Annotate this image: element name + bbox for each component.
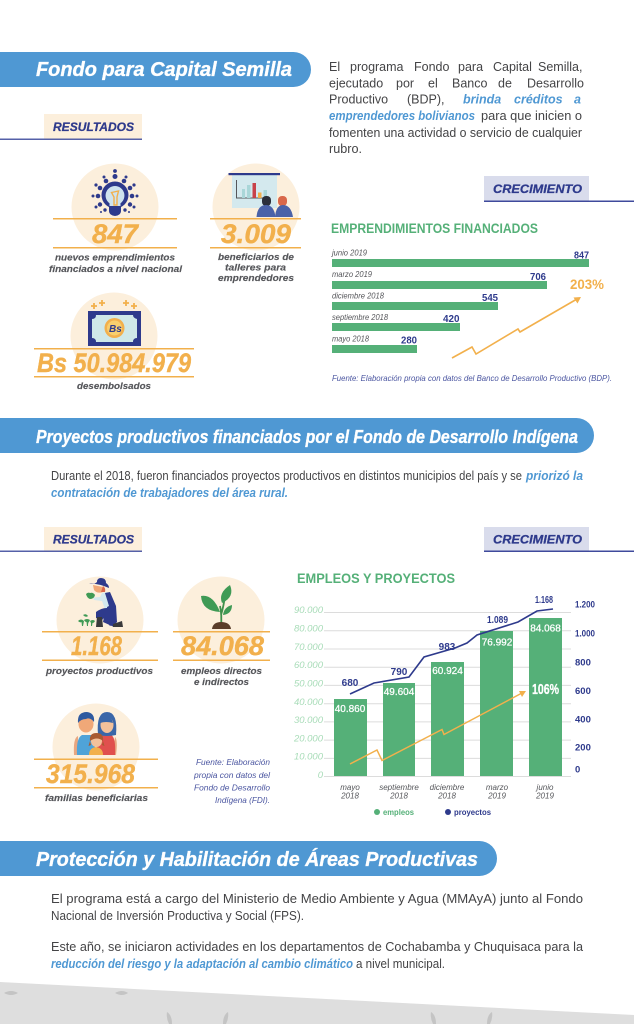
source note: FDI: Fondo de Desarrollo bbox=[194, 782, 270, 792]
combo chart: empleos y proyectos: 80.000 bbox=[294, 624, 324, 634]
tag: crecimiento 2: CRECIMIENTO bbox=[493, 532, 583, 546]
tag: resultados 2: RESULTADOS bbox=[53, 532, 134, 546]
intro paragraph: fomenten una actividad o servicio de cualquier bbox=[329, 126, 582, 140]
stat: 84.068 empleos: e indirectos bbox=[194, 677, 249, 688]
stat: Bs 50.984.979: Bs 50.984.979 bbox=[37, 348, 191, 378]
combo chart: empleos y proyectos: 1.200 bbox=[575, 600, 595, 610]
combo chart: empleos y proyectos: mayo bbox=[340, 783, 360, 792]
icon: family bbox=[74, 712, 117, 755]
bar chart: emprendimientos financiados: 545 bbox=[482, 293, 498, 304]
stat: 847 emprendimientos: financiados a nivel nacional bbox=[49, 264, 182, 275]
intro paragraph: créditos bbox=[514, 92, 563, 106]
bar chart: emprendimientos financiados: junio 2019 bbox=[331, 248, 368, 258]
stat: 3.009 beneficiarios: 3.009 bbox=[221, 219, 291, 249]
icon: presentation board bbox=[228, 173, 293, 217]
combo chart: empleos y proyectos: 20.000 bbox=[293, 734, 324, 744]
paragraph: FDI: contratación de trabajadores del área rural. bbox=[51, 486, 288, 500]
paragraph: FDI: Durante el 2018, fueron financiados proyectos productivos en distintos municipios del país y se bbox=[51, 469, 522, 483]
intro paragraph: para que inicien o bbox=[481, 109, 582, 123]
combo chart: empleos y proyectos: marzo bbox=[486, 783, 509, 792]
arrow: 106% growth bbox=[350, 691, 526, 764]
combo chart: empleos y proyectos: 983 bbox=[439, 642, 456, 653]
bar chart: emprendimientos financiados: Fuente: Elaboración propia con datos del Banco de Desarrollo Productivo (BDP). bbox=[332, 373, 612, 383]
combo chart: empleos y proyectos: 1.089 bbox=[487, 615, 508, 626]
combo chart: empleos y proyectos: 1.168 bbox=[535, 595, 553, 606]
tag: resultados 1: RESULTADOS bbox=[53, 120, 134, 134]
combo chart: empleos y proyectos: 400 bbox=[575, 714, 591, 726]
tag: crecimiento 1 bbox=[484, 176, 634, 202]
combo chart: empleos y proyectos: 600 bbox=[575, 686, 591, 697]
combo chart: empleos y proyectos: 2018 bbox=[437, 792, 456, 800]
paragraph: actividades: a nivel municipal. bbox=[356, 957, 445, 971]
tag: resultados 2 bbox=[0, 527, 142, 552]
intro paragraph: El bbox=[329, 60, 340, 74]
intro paragraph: rubro. bbox=[329, 142, 362, 156]
intro paragraph: (BDP), bbox=[407, 92, 444, 106]
stat: 3.009 beneficiarios: beneficiarios de bbox=[218, 252, 295, 263]
combo chart: empleos y proyectos bbox=[293, 571, 595, 817]
paragraph: actividades: Este año, se iniciaron actividades en los departamentos de Cochabamba y Chuquisaca para la bbox=[51, 940, 583, 954]
intro paragraph: Semilla, bbox=[538, 60, 582, 74]
bar chart: emprendimientos financiados: mayo 2018 bbox=[332, 334, 370, 344]
bar chart: emprendimientos financiados: 420 bbox=[443, 314, 460, 325]
combo chart: empleos y proyectos: 2019 bbox=[487, 792, 506, 800]
combo chart: empleos y proyectos: septiembre bbox=[379, 783, 419, 792]
combo chart: empleos y proyectos: 60.000 bbox=[294, 660, 324, 671]
combo chart: empleos y proyectos: EMPLEOS Y PROYECTOS bbox=[297, 571, 455, 586]
combo chart: empleos y proyectos: 0 bbox=[575, 764, 580, 776]
stat: 315.968 familias: 315.968 bbox=[46, 759, 135, 789]
intro paragraph: de bbox=[498, 76, 512, 90]
legend: empleos bbox=[383, 808, 415, 817]
source note: FDI: propia con datos del bbox=[193, 770, 271, 780]
bar chart: emprendimientos financiados: 280 bbox=[401, 336, 417, 346]
intro paragraph: Productivo bbox=[329, 92, 388, 106]
tag: crecimiento 1: CRECIMIENTO bbox=[493, 182, 583, 196]
stat: 3.009 beneficiarios: talleres para bbox=[225, 262, 286, 274]
intro paragraph: Banco bbox=[452, 76, 487, 90]
bar chart: emprendimientos financiados bbox=[331, 221, 612, 383]
bar chart: emprendimientos financiados: EMPRENDIMIENTOS FINANCIADOS bbox=[331, 221, 538, 236]
intro paragraph: Desarrollo bbox=[527, 76, 584, 90]
combo chart: empleos y proyectos: 50.000 bbox=[294, 678, 324, 690]
combo chart: empleos y proyectos: 2019 bbox=[535, 792, 554, 800]
tag: crecimiento 2 bbox=[484, 527, 634, 552]
intro paragraph bbox=[329, 60, 584, 156]
combo chart: empleos y proyectos: 106% bbox=[532, 681, 559, 698]
combo chart: empleos y proyectos: 49.604 bbox=[384, 687, 415, 698]
stat: 847 emprendimientos: nuevos emprendimientos bbox=[55, 252, 175, 264]
intro paragraph: emprendedores bolivianos bbox=[329, 109, 475, 123]
intro paragraph: por bbox=[396, 76, 414, 90]
banner: Proyectos productivos bbox=[0, 418, 594, 453]
paragraph: FDI: priorizó la bbox=[525, 469, 583, 483]
intro paragraph: el bbox=[428, 76, 438, 90]
combo chart: empleos y proyectos: 1.000 bbox=[575, 628, 595, 640]
bar chart: emprendimientos financiados: 847 bbox=[574, 250, 589, 262]
banner: Protección y Habilitación bbox=[0, 841, 497, 876]
intro paragraph: brinda bbox=[463, 92, 501, 106]
icon: light bulb bbox=[92, 169, 138, 216]
paragraph: FDI bbox=[51, 469, 583, 500]
stat: 3.009 beneficiarios: emprendedores bbox=[218, 273, 294, 284]
combo chart: empleos y proyectos: 84.068 bbox=[530, 624, 561, 634]
icon: banknote: Bs bbox=[109, 324, 122, 335]
combo chart: empleos y proyectos: diciembre bbox=[430, 783, 465, 792]
line: proyectos bbox=[350, 609, 553, 694]
combo chart: empleos y proyectos: junio bbox=[536, 783, 554, 792]
stat: 847 emprendimientos: 847 bbox=[92, 219, 140, 249]
intro paragraph: programa bbox=[350, 60, 404, 74]
bar chart: emprendimientos financiados: septiembre 2018 bbox=[332, 313, 389, 322]
stat: 1.168 proyectos: proyectos productivos bbox=[45, 666, 153, 677]
combo chart: empleos y proyectos: 40.000 bbox=[294, 697, 324, 708]
paragraph: programa: Nacional de Inversión Productiva y Social (FPS). bbox=[51, 909, 304, 923]
combo chart: empleos y proyectos: 76.992 bbox=[482, 638, 513, 648]
footer: grey slope with leaves bbox=[0, 982, 634, 1024]
intro paragraph: a bbox=[574, 92, 581, 106]
banner: Fondo para Capital Semilla bbox=[0, 52, 311, 87]
stat: 84.068 empleos bbox=[173, 576, 270, 688]
combo chart: empleos y proyectos: 2018 bbox=[340, 792, 359, 800]
stat: Bs 50.984.979: desembolsados bbox=[77, 381, 151, 392]
combo chart: empleos y proyectos: 2018 bbox=[389, 792, 408, 800]
stat: 84.068 empleos: empleos directos bbox=[181, 666, 262, 677]
source note: FDI bbox=[193, 757, 271, 805]
tag: resultados 1 bbox=[0, 114, 142, 140]
legend: proyectos bbox=[454, 808, 492, 817]
stat: 1.168 proyectos bbox=[42, 576, 158, 677]
combo chart: empleos y proyectos: 10.000 bbox=[294, 752, 324, 762]
stat: 847 emprendimientos bbox=[49, 164, 182, 275]
icon: banknote bbox=[88, 300, 141, 346]
bar chart: emprendimientos financiados: 706 bbox=[530, 272, 546, 283]
intro paragraph: Capital bbox=[493, 60, 532, 74]
bar chart: emprendimientos financiados: marzo 2019 bbox=[332, 270, 373, 279]
icon: farmer bbox=[78, 578, 123, 627]
combo chart: empleos y proyectos: 90.000 bbox=[294, 605, 324, 616]
icon: plant bbox=[201, 585, 232, 629]
combo chart: empleos y proyectos: 30.000 bbox=[294, 715, 324, 726]
legend bbox=[374, 808, 492, 817]
source note: FDI: Indígena (FDI). bbox=[215, 795, 270, 805]
intro paragraph: Fondo bbox=[414, 60, 449, 74]
combo chart: empleos y proyectos: 40.860 bbox=[335, 704, 366, 715]
intro paragraph: para bbox=[458, 60, 483, 74]
paragraph: programa: El programa está a cargo del Ministerio de Medio Ambiente y Agua (MMAyA) junto al Fondo bbox=[51, 892, 583, 906]
stat: 3.009 beneficiarios bbox=[210, 164, 301, 284]
stat: 84.068 empleos: 84.068 bbox=[181, 631, 264, 661]
paragraph: actividades bbox=[51, 940, 583, 971]
combo chart: empleos y proyectos: 790 bbox=[391, 667, 408, 678]
arrow: 203% growth bbox=[452, 276, 605, 358]
bar chart: emprendimientos financiados: diciembre 2018 bbox=[332, 292, 385, 300]
source note: FDI: Fuente: Elaboración bbox=[196, 757, 270, 767]
arrow: 203% growth: 203% bbox=[570, 276, 605, 292]
combo chart: empleos y proyectos: 60.924 bbox=[432, 666, 463, 677]
combo chart: empleos y proyectos: 680 bbox=[342, 678, 359, 689]
intro paragraph: ejecutado bbox=[329, 76, 383, 90]
banner: Protección y Habilitación: Protección y Habilitación de Áreas Productivas bbox=[36, 848, 478, 871]
paragraph: actividades: reducción del riesgo y la adaptación al cambio climático bbox=[51, 957, 353, 971]
stat: 315.968 familias: familias beneficiarias bbox=[45, 793, 148, 804]
banner: Fondo para Capital Semilla: Fondo para Capital Semilla bbox=[36, 59, 292, 81]
paragraph: programa bbox=[51, 892, 583, 923]
combo chart: empleos y proyectos: 70.000 bbox=[294, 642, 324, 653]
combo chart: empleos y proyectos: 200 bbox=[575, 742, 591, 754]
stat: Bs 50.984.979 bbox=[34, 292, 194, 392]
stat: 315.968 familias bbox=[34, 704, 158, 804]
combo chart: empleos y proyectos: 800 bbox=[575, 658, 591, 668]
combo chart: empleos y proyectos: 0 bbox=[318, 770, 324, 781]
stat: 1.168 proyectos: 1.168 bbox=[71, 631, 122, 661]
banner: Proyectos productivos: Proyectos productivos financiados por el Fondo de Desarrollo Indígena bbox=[36, 427, 578, 447]
